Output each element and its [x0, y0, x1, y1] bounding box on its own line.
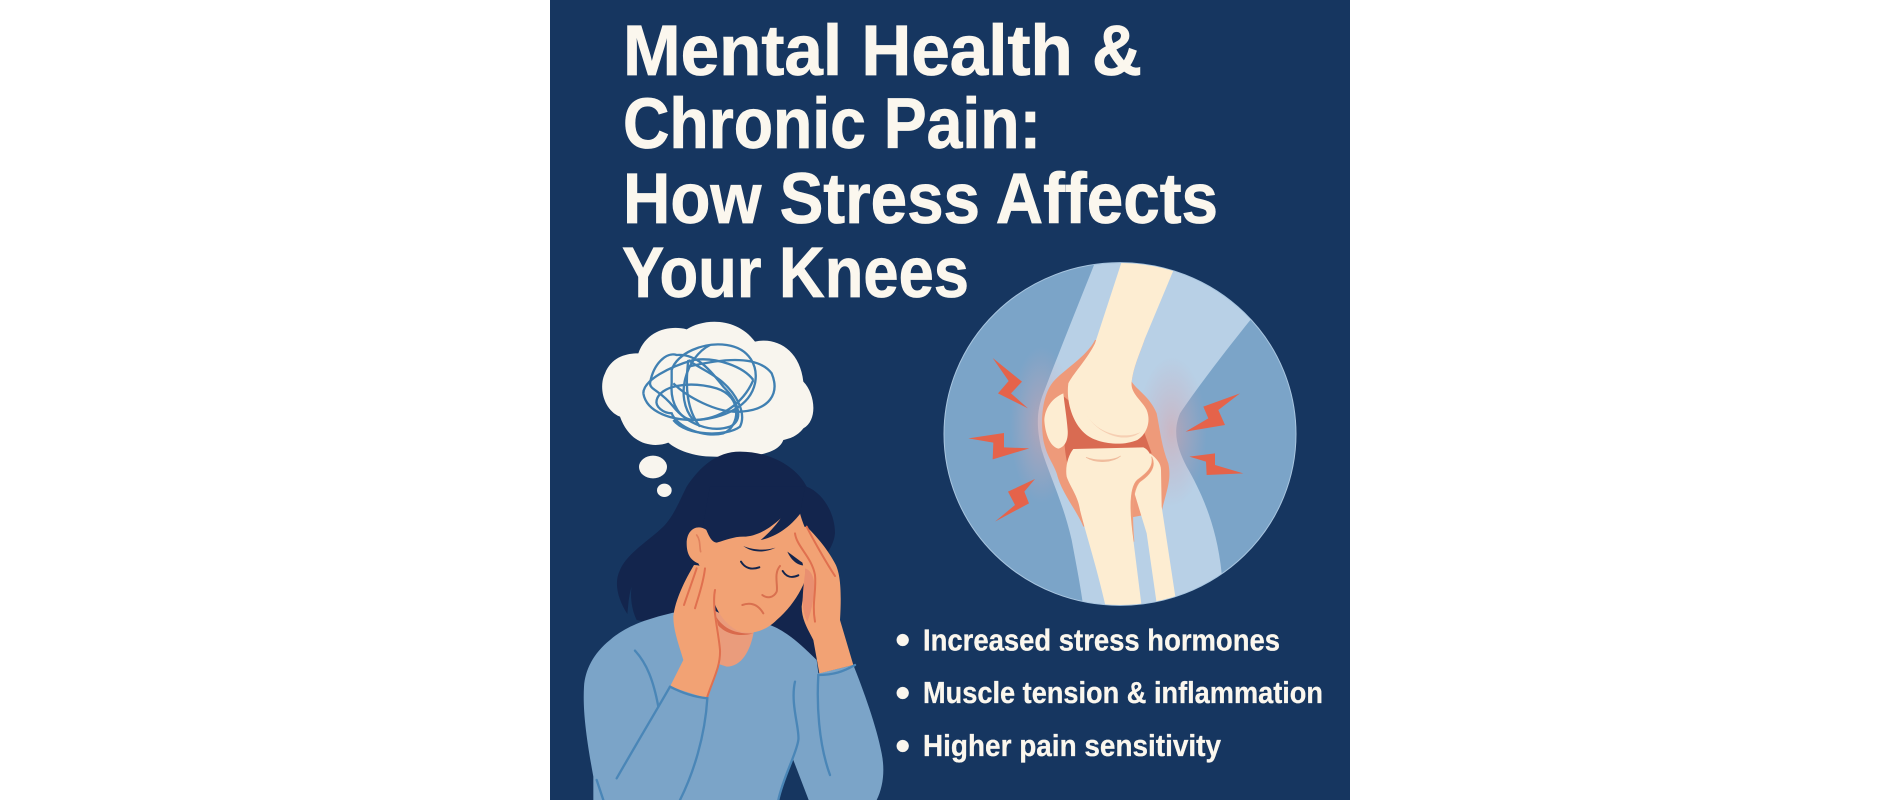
- knee illustration: [944, 257, 1296, 607]
- thought cloud: [602, 322, 813, 497]
- pain bolts: [968, 358, 1243, 522]
- title: Chronic Pain:: [623, 85, 1041, 164]
- facial features: [741, 546, 808, 613]
- face: [687, 513, 811, 633]
- title: Mental Health &: [623, 12, 1142, 91]
- bullet: stress hormones: Increased stress hormones: [923, 622, 1280, 658]
- title: How Stress Affects: [623, 160, 1218, 239]
- infographic canvas: [550, 0, 1350, 800]
- tibia: [1066, 447, 1152, 607]
- knee circle background: [944, 263, 1296, 605]
- title: [622, 12, 1218, 313]
- bullet: muscle tension: Muscle tension & inflammation: [923, 675, 1323, 710]
- left hand: [670, 565, 721, 698]
- right hand: [795, 527, 853, 673]
- panel background: [550, 0, 1350, 800]
- hair fringe: [703, 487, 805, 543]
- fibula: [1134, 453, 1175, 603]
- title: Your Knees: [622, 234, 969, 313]
- bullet: pain sensitivity: Higher pain sensitivity: [923, 728, 1222, 763]
- jaw shadow: [712, 607, 753, 635]
- neck: [713, 610, 754, 667]
- bullet list: [897, 622, 1323, 763]
- patella: [1044, 393, 1068, 449]
- femur: [1068, 257, 1175, 444]
- person with thought bubble: [584, 322, 883, 800]
- hair back: [617, 452, 835, 663]
- tangled scribble: [643, 344, 774, 435]
- ear shadow: [697, 535, 701, 552]
- sweater lines: [597, 651, 855, 800]
- sweater: [584, 613, 883, 800]
- knee anatomy: [1010, 257, 1252, 607]
